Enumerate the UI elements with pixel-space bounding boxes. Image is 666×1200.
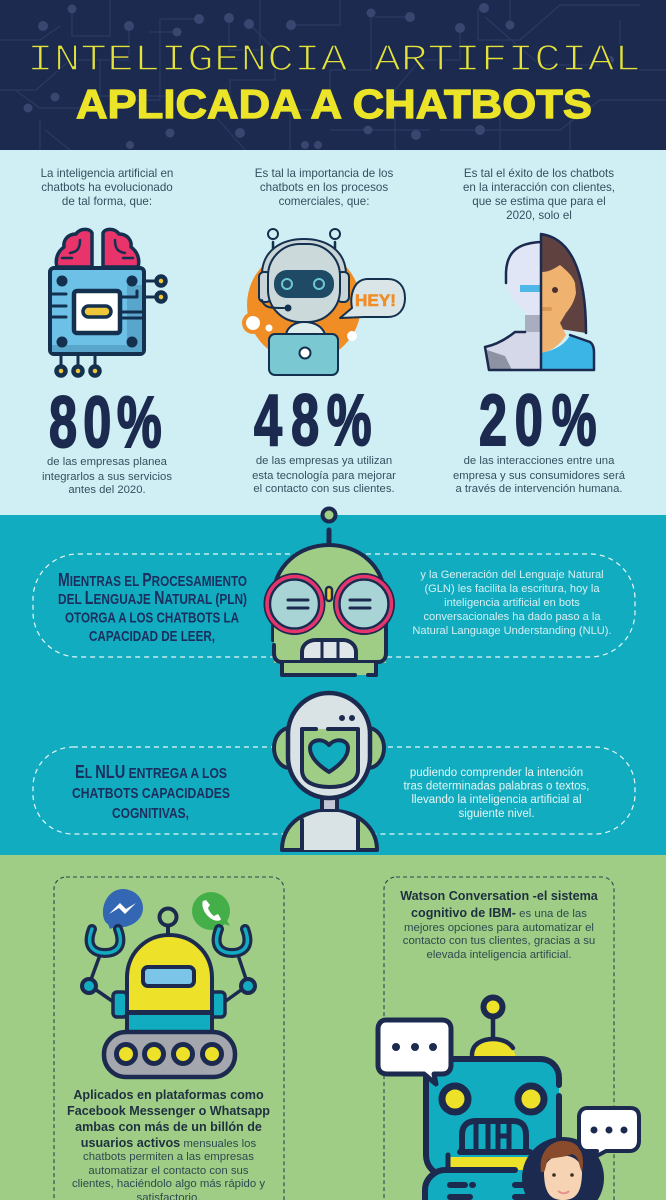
title line 1: INTELIGENCIA ARTIFICIAL <box>27 39 641 82</box>
text: Watson: cognitivo de IBM- es una de las <box>411 906 587 920</box>
text: Watson: mejores opciones para automatizar el <box>404 922 594 934</box>
text: NLU statement: COGNITIVAS, <box>112 805 189 822</box>
icon: robot with glasses <box>264 508 395 675</box>
text: column 3 intro: 2020, solo el <box>506 209 572 222</box>
icon: robot on tracks <box>82 908 255 1077</box>
text: Watson: contacto con tus clientes, gracias a su <box>403 935 595 947</box>
icon: robot with headset and laptop <box>242 229 405 375</box>
text: 80% description: integrarlos a sus servicios <box>42 471 172 483</box>
text: column 2 intro: chatbots en los procesos <box>260 181 388 194</box>
text: intent statement: pudiendo comprender la intención <box>410 767 583 779</box>
panel: applications <box>0 855 666 1200</box>
text: GLN statement: inteligencia artificial en bots <box>444 597 580 609</box>
icon: robot with heart <box>274 693 384 850</box>
text: platforms: ambas con más de un billón de <box>75 1120 262 1134</box>
text: PLN statement: OTORGA A LOS CHATBOTS LA <box>65 610 239 626</box>
text: platforms: automatizar el contacto con sus <box>88 1165 249 1177</box>
text: NLU statement: CHATBOTS CAPACIDADES <box>72 785 230 802</box>
text: NLU statement <box>72 762 230 822</box>
text: 80% description: de las empresas planea <box>47 456 168 468</box>
title line 2: APLICADA A CHATBOTS <box>76 81 592 127</box>
text: column 3 intro: que se estima que para el <box>472 195 606 208</box>
text: platforms: chatbots permiten a las empresas <box>83 1151 254 1163</box>
text: PLN statement: DEL LENGUAJE NATURAL (PLN) <box>58 588 247 608</box>
text: GLN statement: (GLN) les facilita la escritura, hoy la <box>424 583 600 595</box>
text: HEY!: HEY! <box>355 291 396 310</box>
icon: brain chip <box>50 229 166 376</box>
stat: 20%: 20% <box>479 381 597 461</box>
text: PLN statement <box>58 570 247 645</box>
stat: 80%: 80% <box>49 383 162 463</box>
text: platforms: usuarios activos mensuales los <box>81 1136 256 1150</box>
text: 20% description: a través de intervención humana. <box>455 483 623 495</box>
text: Watson <box>400 889 599 961</box>
text: intent statement: llevando la inteligencia artificial al <box>411 794 582 806</box>
text: platforms: Facebook Messenger o Whatsapp <box>67 1104 270 1118</box>
panel: language processing <box>0 508 666 855</box>
dashed pill 2 <box>33 747 635 834</box>
text: column 1 intro: chatbots ha evolucionado <box>41 181 173 194</box>
text: column 2 intro: Es tal la importancia de los <box>255 167 393 180</box>
text: GLN statement: y la Generación del Lenguaje Natural <box>420 569 604 581</box>
text: GLN statement: Natural Language Understanding (NLU). <box>412 625 612 637</box>
text: column 2 intro: comerciales, que: <box>279 195 369 208</box>
stat: 48%: 48% <box>254 381 372 461</box>
text: 48% description: el contacto con sus clientes. <box>253 483 395 495</box>
icon: Watson robot <box>378 998 639 1200</box>
text: Watson: Watson Conversation -el sistema <box>400 889 599 903</box>
text: NLU statement: EL NLU ENTREGA A LOS <box>75 762 227 782</box>
text: platforms <box>67 1088 270 1200</box>
text: GLN statement: conversacionales ha dado paso a la <box>423 611 601 623</box>
panel: header <box>0 0 666 150</box>
dashed box left <box>54 877 284 1200</box>
text: 20% description: de las interacciones entre una <box>464 455 615 467</box>
dashed box right <box>384 877 614 1200</box>
panel: statistics <box>0 150 666 515</box>
text: PLN statement: MIENTRAS EL PROCESAMIENTO <box>58 570 247 590</box>
text: platforms: clientes, haciéndolo algo más rápido y <box>72 1178 265 1190</box>
text: Watson: elevada inteligencia artificial. <box>426 949 572 961</box>
text: intent statement: siguiente nivel. <box>458 808 535 820</box>
text: column 3 intro: Es tal el éxito de los chatbots <box>464 167 614 180</box>
icon: messenger <box>103 889 143 929</box>
dashed pill 1 <box>33 554 635 657</box>
icon: half robot, half woman <box>485 234 594 370</box>
text: column 3 intro: en la interacción con clientes, <box>463 181 615 194</box>
text: 20% description: empresa y sus consumidores será <box>453 470 626 482</box>
text: column 1 intro: de tal forma, que: <box>62 195 152 208</box>
icon: whatsapp <box>192 892 230 930</box>
text: 80% description: antes del 2020. <box>68 484 146 496</box>
text: intent statement: tras determinadas palabras o textos, <box>403 780 590 792</box>
text: 48% description: esta tecnología para mejorar <box>252 470 396 482</box>
text: 48% description: de las empresas ya utilizan <box>256 455 392 467</box>
text: PLN statement: CAPACIDAD DE LEER, <box>89 628 215 645</box>
text: platforms: Aplicados en plataformas como <box>73 1088 264 1102</box>
text: column 1 intro: La inteligencia artificial en <box>41 167 173 180</box>
